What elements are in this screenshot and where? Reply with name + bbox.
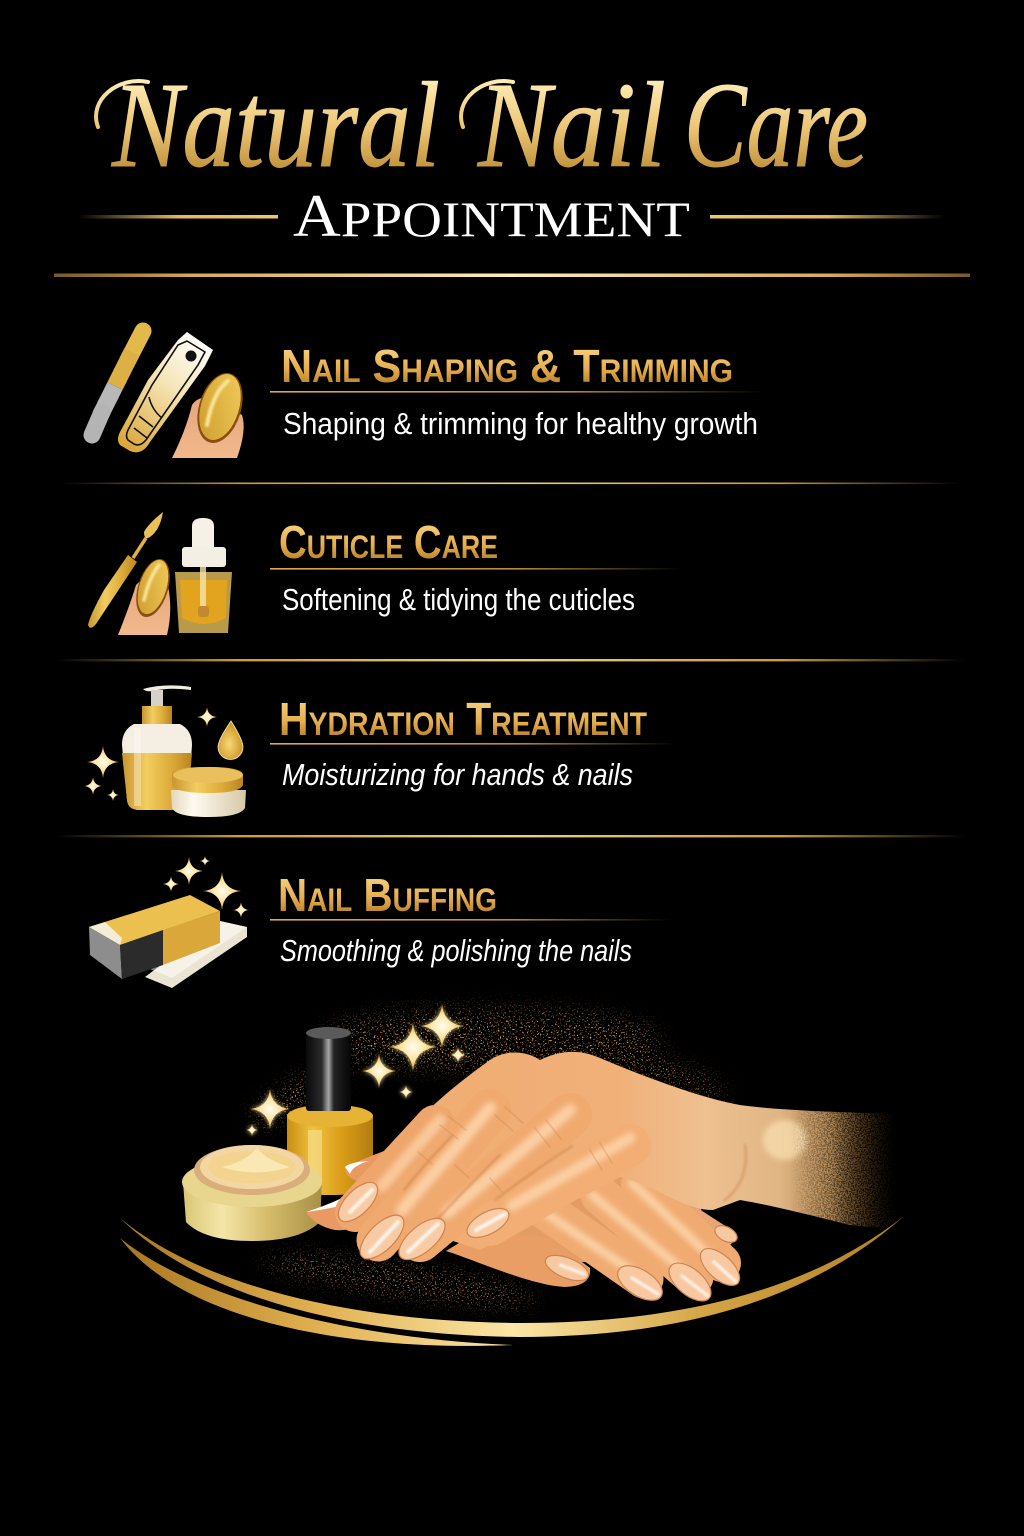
title: Natural Nail Care: Nail <box>477 58 666 193</box>
knuckle creases <box>418 1107 612 1192</box>
subtitle rule right <box>710 215 945 218</box>
under fingertips with french tips <box>306 1148 402 1230</box>
divider <box>55 835 965 837</box>
subtitle: Appointment: APPOINTMENT <box>293 183 690 249</box>
description: Softening & tidying the cuticles <box>282 582 635 617</box>
row 1: nail shaping and trimming <box>92 331 765 458</box>
illustration: hands, polish, cream and gold swoosh <box>120 980 930 1346</box>
icon: nail file, clipper and nail <box>92 331 251 458</box>
row 3: hydration treatment <box>84 685 677 817</box>
finger separators <box>404 1136 572 1225</box>
icon: lotion bottle, jar, oil drop and sparkles <box>84 685 246 817</box>
icon: cream jar <box>182 1145 322 1241</box>
sparkles <box>246 1004 466 1136</box>
icon: cuticle tool, nail and oil bottle <box>88 512 232 635</box>
title: Natural Nail Care: Natural <box>111 58 440 193</box>
heading: nail buffing: Nail Buffing <box>278 869 497 921</box>
upper hand <box>332 1052 905 1267</box>
gold swoosh <box>120 1216 904 1346</box>
gold dust <box>238 992 737 1322</box>
description: Shaping & trimming for healthy growth <box>283 406 758 441</box>
divider <box>55 659 965 661</box>
icon: buffer block and sparkles <box>89 856 249 988</box>
icon: nail polish bottle <box>287 1027 373 1195</box>
row 4: nail buffing <box>89 856 670 988</box>
heading underline <box>270 391 765 393</box>
subtitle rule left <box>78 215 278 218</box>
description: Moisturizing for hands & nails <box>282 757 633 792</box>
lower hand <box>446 1170 746 1308</box>
wrist speckled fade <box>793 1110 890 1228</box>
heading underline <box>270 568 682 570</box>
description: Smoothing & polishing the nails <box>280 933 632 968</box>
title block <box>78 58 945 249</box>
heading: nail shaping and trimming: Nail Shaping & Trimming <box>281 340 733 392</box>
heading underline <box>270 743 677 745</box>
infographic canvas <box>54 79 970 1346</box>
heading: hydration treatment: Hydration Treatment <box>279 693 647 745</box>
title: Natural Nail Care <box>96 58 868 193</box>
header divider <box>54 274 970 277</box>
heading underline <box>270 919 670 921</box>
row 2: cuticle care <box>88 512 682 635</box>
divider <box>60 482 960 484</box>
title: Natural Nail Care: Care <box>684 58 868 193</box>
heading: cuticle care: Cuticle Care <box>279 516 498 568</box>
